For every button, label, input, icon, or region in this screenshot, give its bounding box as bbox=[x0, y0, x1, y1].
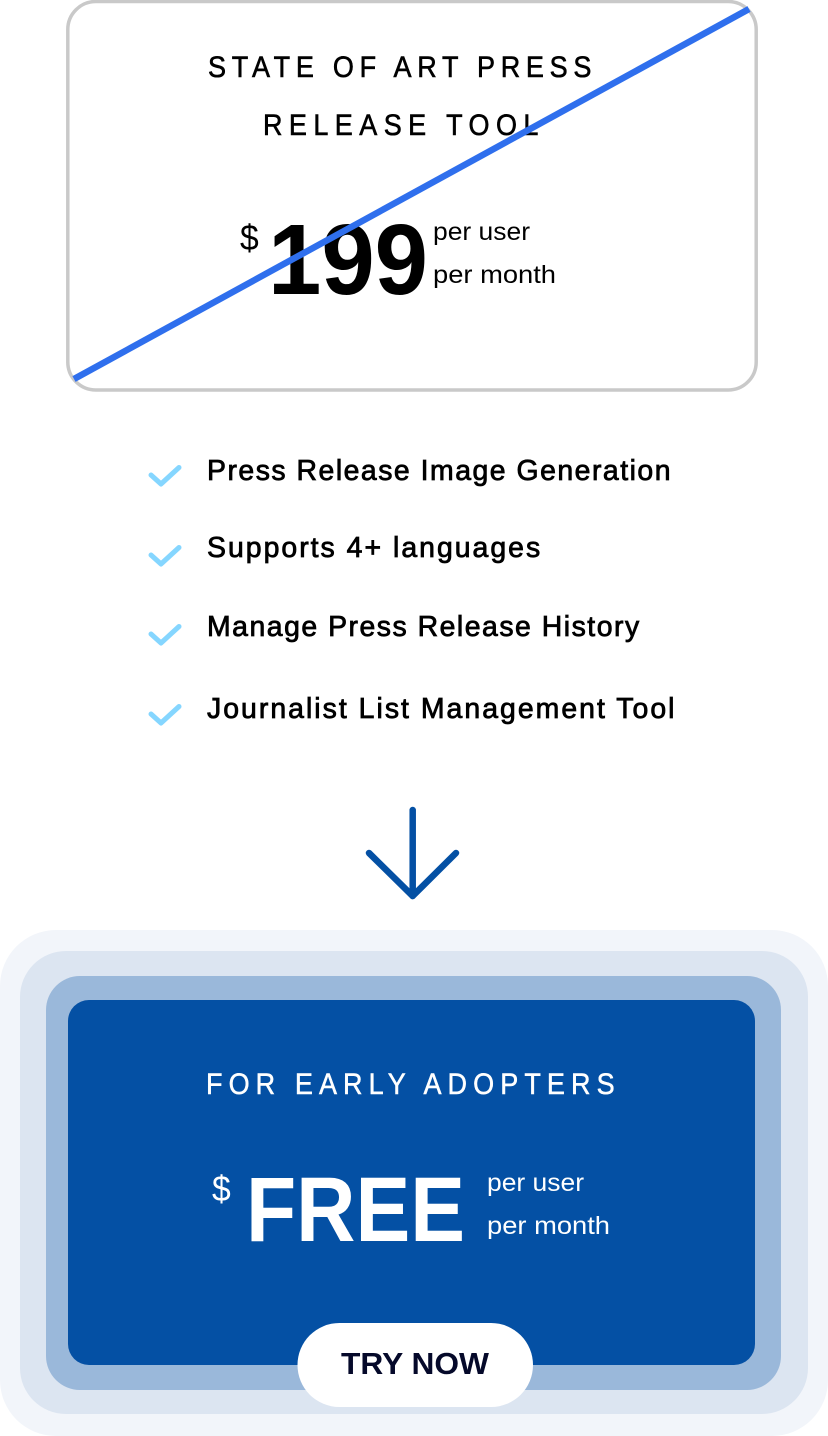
outer glow ring bbox=[0, 930, 828, 1436]
card outline bbox=[68, 2, 756, 390]
main blue panel bbox=[68, 1000, 755, 1365]
price: $199 per user per month bbox=[240, 204, 556, 316]
price: free per user per month: per month bbox=[487, 1212, 610, 1240]
price: $199 per user per month: per month bbox=[433, 261, 556, 289]
feature: supports 4+ languages: Supports 4+ languages bbox=[207, 532, 540, 564]
heading: state of art press release tool: STATE OF ART PRESS bbox=[208, 51, 591, 84]
panel: original price card bbox=[68, 2, 756, 390]
second ring bbox=[20, 951, 808, 1414]
third ring bbox=[46, 976, 781, 1390]
price: free per user per month: $ bbox=[212, 1170, 231, 1210]
feature list bbox=[151, 455, 674, 725]
heading: for early adopters: FOR EARLY ADOPTERS bbox=[206, 1068, 615, 1101]
price: $199 per user per month: per user bbox=[433, 218, 530, 246]
feature: journalist list management tool: Journalist List Management Tool bbox=[207, 693, 674, 725]
heading: state of art press release tool: RELEASE TOOL bbox=[263, 109, 538, 142]
price: $199 per user per month: $ bbox=[240, 219, 259, 259]
panel: early adopters offer bbox=[0, 930, 828, 1436]
arrow: down bbox=[369, 810, 456, 896]
price: free per user per month: per user bbox=[487, 1169, 584, 1197]
strikethrough line bbox=[74, 9, 749, 379]
button: try now: TRY NOW bbox=[341, 1346, 490, 1381]
feature: manage press release history: Manage Press Release History bbox=[207, 611, 640, 643]
price: free per user per month: FREE bbox=[246, 1159, 465, 1261]
price: free per user per month bbox=[212, 1159, 610, 1261]
button: try now bbox=[298, 1323, 533, 1407]
price: $199 per user per month: 199 bbox=[268, 204, 428, 316]
feature: press release image generation: Press Release Image Generation bbox=[207, 455, 671, 487]
heading: state of art press release tool bbox=[208, 51, 591, 142]
